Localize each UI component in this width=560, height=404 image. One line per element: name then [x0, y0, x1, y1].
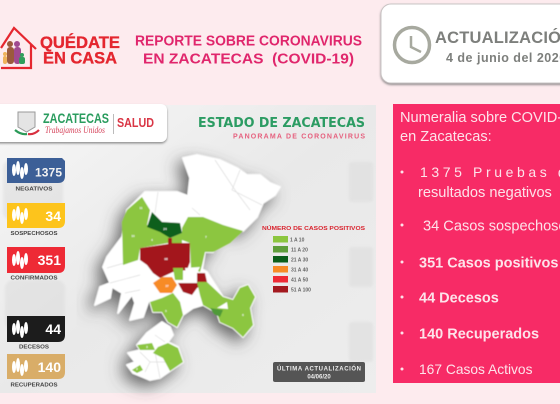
map base with shadow: [95, 155, 280, 380]
last update box: ÚLTIMA ACTUALIZACIÓN: [277, 364, 361, 372]
header card: zacatecas salud: [0, 104, 167, 142]
region: dark green: [147, 212, 182, 238]
icon: coat of arms: [15, 112, 39, 134]
municipality values: 6: [242, 313, 244, 317]
municipality values: 3: [146, 345, 148, 349]
stat: recuperados: 140: [38, 359, 61, 375]
municipality values: 2: [136, 367, 138, 371]
item: decesos: 44 Decesos: [419, 290, 499, 306]
region: green west middle: [168, 233, 182, 243]
municipality values: 10: [131, 234, 135, 238]
map heading: ESTADO DE ZACATECAS: [198, 116, 365, 131]
region: dark red centre: [140, 238, 190, 278]
stat: recuperados: [7, 354, 65, 388]
logo text: [40, 33, 120, 68]
region: green south centre: [150, 293, 183, 327]
item: positivos: 351 Casos positivos: [419, 256, 558, 272]
stat: decesos: [7, 316, 65, 350]
item: pruebas: resultados negativos: [418, 185, 552, 201]
last update box: 04/06/20: [307, 374, 331, 380]
choropleth map: [95, 155, 280, 380]
header card: zacatecas salud: SALUD: [117, 116, 154, 130]
legend: 31 A 40: [291, 268, 308, 274]
header card: zacatecas salud: ZACATECAS: [43, 110, 109, 126]
municipality values: 37: [165, 284, 169, 288]
icon: people: [12, 206, 28, 224]
logo: quédate en casa: [1, 28, 120, 68]
stat: sospechosos: 34: [45, 208, 61, 224]
item: recuperados: 140 Recuperados: [419, 326, 539, 342]
municipality values: 7: [205, 235, 207, 239]
region: white centre: [185, 267, 200, 282]
header card: zacatecas salud: Trabajamos Unidos: [45, 125, 105, 135]
icon: people: [12, 358, 28, 376]
icon: people: [12, 161, 28, 179]
municipality values: 11: [139, 206, 143, 210]
municipality values: 24: [163, 227, 167, 231]
stat: negativos: [7, 158, 65, 192]
region: small green centre: [173, 268, 183, 280]
logo text: EN CASA: [43, 50, 117, 68]
region: green east: [197, 282, 255, 337]
icon: people: [12, 320, 28, 338]
panel: state map: [0, 104, 376, 393]
region: green west: [122, 197, 170, 265]
region: green northeast: [182, 217, 243, 272]
map heading: PANORAMA DE CORONAVIRUS: [233, 134, 365, 140]
heading: reporte: [135, 34, 362, 68]
item: pruebas: [400, 164, 560, 201]
legend: 1 A 10: [290, 238, 305, 244]
municipality borders: [107, 160, 262, 378]
region: dark green east: [210, 308, 223, 317]
last update box: [273, 362, 365, 382]
icon: people: [12, 251, 28, 269]
legend: 51 A 100: [291, 288, 311, 294]
stat: sospechosos: [7, 203, 65, 237]
municipality values: [131, 206, 244, 371]
region: dark red east: [178, 273, 207, 295]
stat: sospechosos: SOSPECHOSOS: [10, 231, 58, 237]
legend: [262, 225, 365, 294]
stat: decesos: DECESOS: [19, 344, 49, 350]
heading: reporte: REPORTE SOBRE CORONAVIRUS: [135, 34, 362, 50]
stat: confirmados: 351: [38, 252, 61, 268]
stat: decesos: 44: [45, 321, 61, 337]
panel: update date: [381, 4, 560, 83]
heading: reporte: EN ZACATECAS (COVID-19): [143, 52, 354, 68]
region: white east: [217, 302, 228, 309]
legend: 21 A 30: [291, 258, 308, 264]
icon: house with family: [1, 28, 36, 68]
panel: numeralia: [393, 104, 560, 383]
panel heading: en Zacatecas:: [400, 129, 492, 145]
regions: green south: [132, 343, 183, 373]
municipality values: 4: [151, 238, 153, 242]
stat: negativos: 1375: [35, 166, 62, 180]
stat: recuperados: RECUPERADOS: [10, 382, 58, 388]
item: activos: 167 Casos Activos: [419, 362, 533, 377]
icon: clock: [394, 28, 430, 62]
legend: 11 A 20: [291, 248, 308, 254]
stat: confirmados: CONFIRMADOS: [10, 276, 58, 282]
municipality values: 5: [165, 309, 167, 313]
stat: negativos: NEGATIVOS: [16, 186, 53, 192]
watermark shields: [3, 160, 373, 362]
legend: 41 A 50: [291, 278, 308, 284]
region: orange: [153, 277, 177, 293]
municipality values: 98: [164, 257, 168, 261]
map heading: [198, 116, 365, 140]
stat: confirmados: [7, 247, 65, 282]
legend: NÚMERO DE CASOS POSITIVOS: [262, 225, 365, 232]
logo text: QUÉDATE: [40, 33, 120, 52]
